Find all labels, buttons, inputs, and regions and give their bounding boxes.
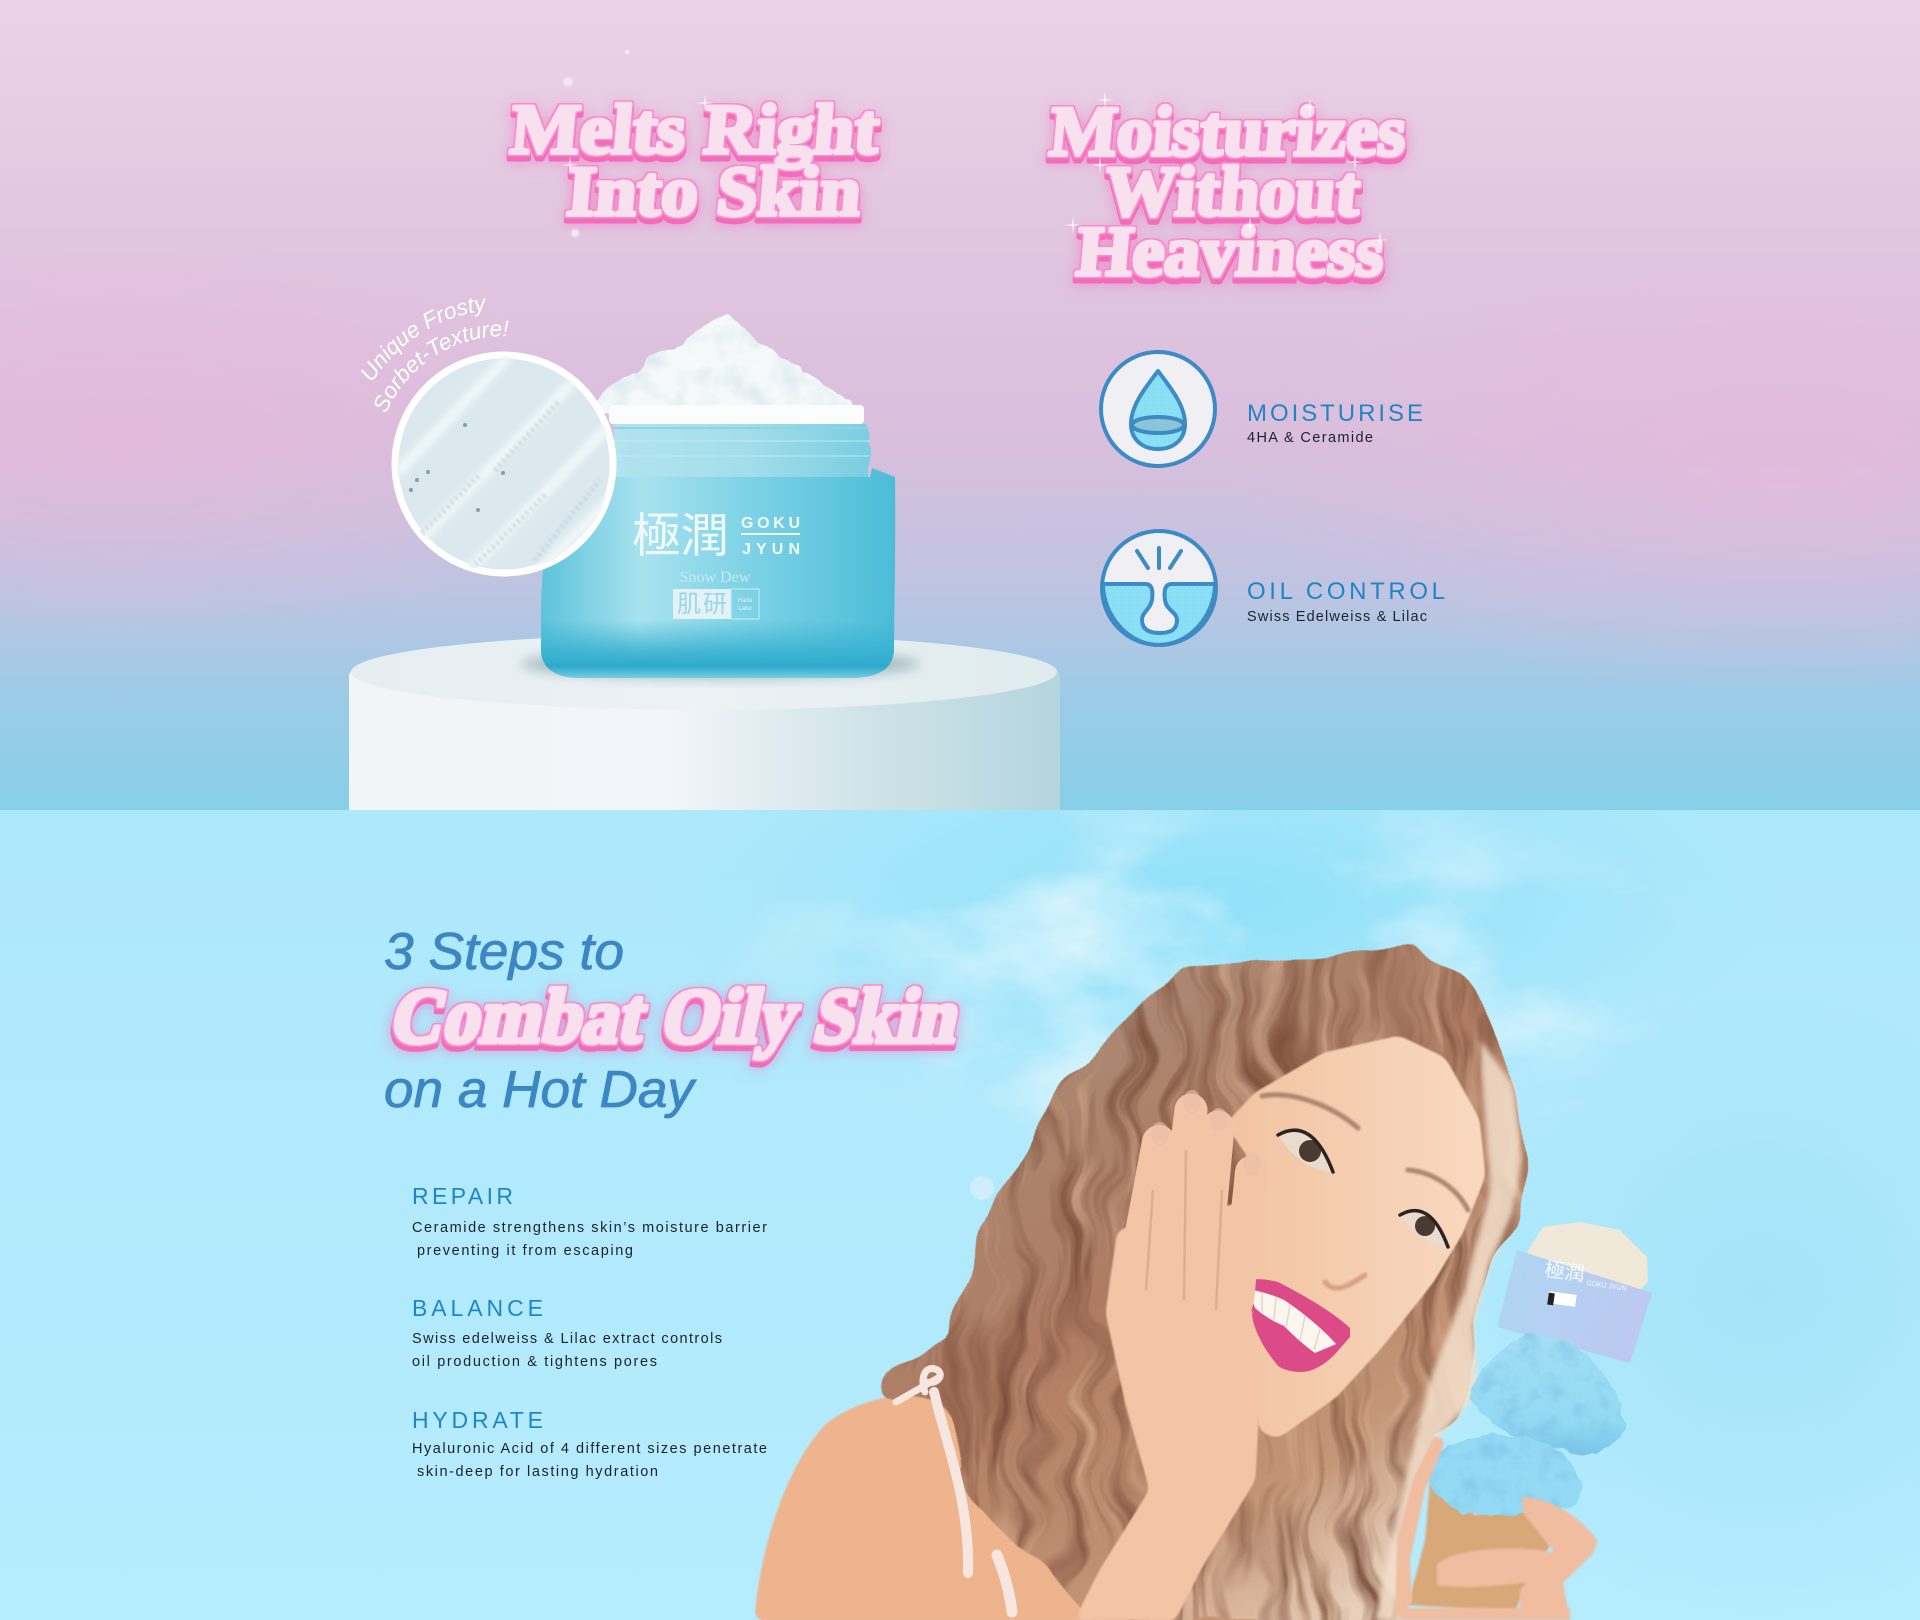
icon: oil control pore: [1102, 531, 1216, 645]
text: oil control: [1247, 578, 1445, 625]
product jar: [541, 314, 895, 678]
shoulder and chest: [754, 1396, 1090, 1620]
jar logo: Snow Dew: [680, 569, 751, 586]
mouth: [1247, 1279, 1350, 1372]
mini product jar on scoops: 極潤: [1543, 1258, 1586, 1286]
jar rim: [609, 405, 864, 424]
icon: moisturise water drop: [1101, 352, 1215, 466]
nose shadow: [1325, 1275, 1365, 1288]
texture callout lens: [395, 355, 620, 590]
eyebrows: [1262, 1095, 1468, 1210]
step: hydrate: HYDRATE: [412, 1407, 543, 1433]
cream swirl: [595, 314, 858, 412]
top ice-cream scoop: [1470, 1335, 1625, 1455]
heading: Moisturizes Without Heaviness: Heaviness: [1074, 213, 1387, 291]
background: bottom sky panel with clouds: [699, 810, 1920, 1454]
background: top pink-to-blue panel: [0, 0, 1920, 810]
heading: 3 Steps to Combat Oily Skin on a Hot Day: 3 Steps to: [384, 923, 624, 981]
heading: 3 Steps to Combat Oily Skin on a Hot Day: on a Hot Day: [384, 1061, 697, 1119]
step: balance: oil production & tightens pores: [412, 1354, 657, 1370]
heading: Moisturizes Without Heaviness: [1047, 93, 1409, 291]
face: [1226, 1036, 1485, 1438]
step: hydrate: [412, 1407, 767, 1480]
step: balance: Swiss edelweiss & Lilac extract controls: [412, 1331, 722, 1347]
eye left: [1278, 1130, 1333, 1172]
step: repair: REPAIR: [412, 1183, 513, 1209]
photo: woman with ice-cream product: [755, 943, 1652, 1620]
jar neck: [614, 424, 871, 480]
hand holding cone: [1395, 1437, 1597, 1620]
heading: Melts Right Into Skin: Melts Right: [508, 91, 883, 169]
hand on cheek: [1075, 1090, 1261, 1620]
decorative bubble: [970, 1176, 994, 1200]
bright rim-lit hair: [1375, 1040, 1522, 1620]
jar logo: GOKU: [741, 515, 800, 532]
lower ice-cream scoop: [1426, 1435, 1580, 1515]
text: moisturise: [1247, 400, 1423, 446]
text: moisturise: MOISTURISE: [1247, 400, 1423, 427]
mini product jar on scoops: GOKU JYUN: [1586, 1280, 1627, 1293]
pedestal: [349, 634, 1060, 810]
heading: Moisturizes Without Heaviness: Moisturizes: [1047, 93, 1409, 171]
heading: Melts Right Into Skin: [508, 91, 883, 231]
jar logo: JYUN: [742, 541, 800, 558]
heading: 3 Steps to Combat Oily Skin on a Hot Day: [384, 923, 969, 1119]
eye right: [1400, 1211, 1448, 1247]
step: repair: Ceramide strengthens skin’s moisture barrier: [412, 1220, 767, 1236]
heading: 3 Steps to Combat Oily Skin on a Hot Day: Combat Oily Skin: [384, 974, 969, 1060]
jar logo: Hada: [738, 598, 753, 604]
step: hydrate: skin-deep for lasting hydration: [417, 1464, 658, 1480]
base strip behind hair: [1194, 1616, 1260, 1620]
jar logo: [632, 509, 800, 619]
mini product jar on scoops: [1497, 1222, 1652, 1363]
jar body: [541, 468, 895, 678]
step: repair: [412, 1183, 767, 1259]
hair: [865, 943, 1522, 1620]
jar logo: 肌研: [677, 591, 727, 618]
step: repair: preventing it from escaping: [417, 1243, 633, 1259]
jar logo: Labo: [738, 606, 752, 612]
step: hydrate: Hyaluronic Acid of 4 different sizes penetrate: [412, 1441, 767, 1457]
callout text: Unique Frosty Sorbet-Texture!: Sorbet-Texture!: [374, 320, 508, 412]
strap with bow: [896, 1369, 1012, 1612]
callout text: Unique Frosty Sorbet-Texture!: Unique Frosty: [361, 298, 486, 380]
text: oil control: Swiss Edelweiss & Lilac: [1247, 609, 1427, 625]
step: balance: [412, 1295, 722, 1370]
heading: Melts Right Into Skin: Into Skin: [564, 153, 864, 231]
sparkles around headings: [561, 50, 1389, 249]
step: balance: BALANCE: [412, 1295, 543, 1321]
jar logo: 極潤: [632, 509, 729, 562]
text: moisturise: 4HA & Ceramide: [1247, 430, 1373, 446]
ice-cream cone: [1408, 1480, 1550, 1612]
heading: Moisturizes Without Heaviness: Without: [1102, 153, 1364, 231]
text: oil control: OIL CONTROL: [1247, 578, 1445, 605]
fingernails: [1154, 1090, 1248, 1158]
